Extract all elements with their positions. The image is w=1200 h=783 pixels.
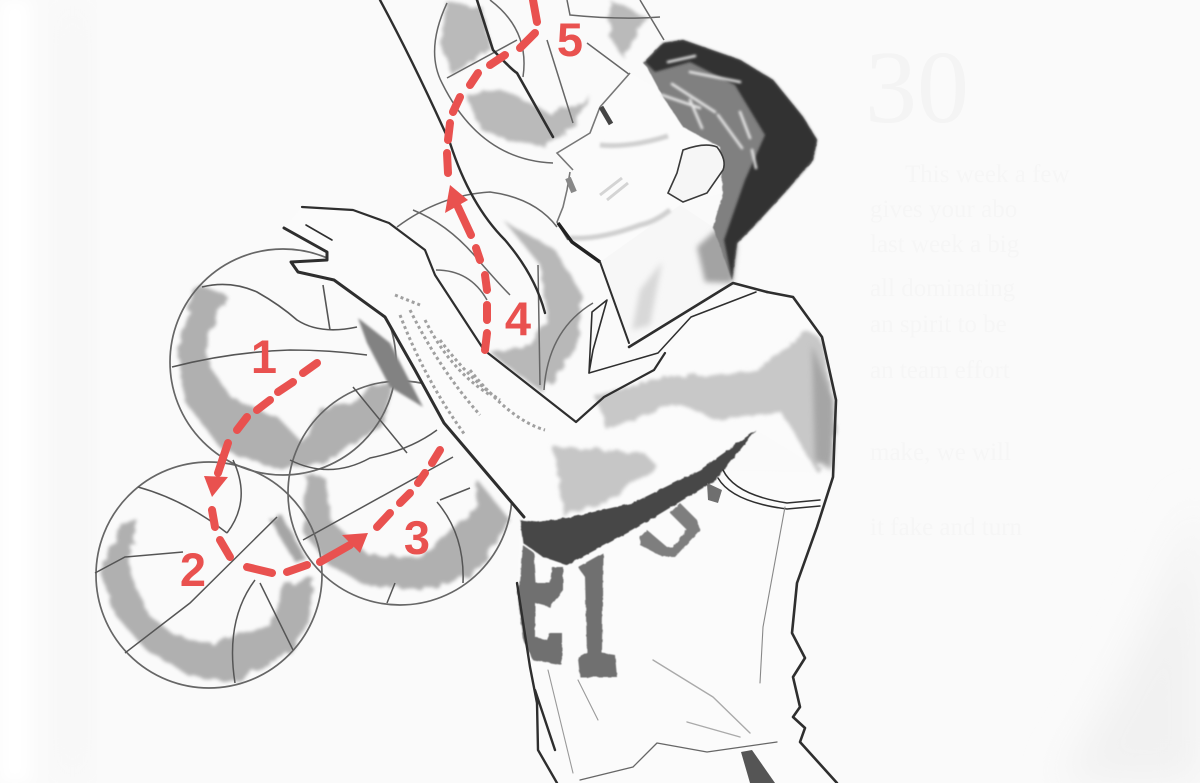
jersey torso <box>517 470 837 783</box>
faint bleed-through page text: an spirit to be <box>870 311 1007 338</box>
hair <box>643 40 817 280</box>
faint bleed-through page text: last week a big <box>870 231 1020 258</box>
faint bleed-through page text: make, we will <box>870 439 1011 466</box>
faint bleed-through page text: This week a few <box>905 161 1070 188</box>
arm and hand <box>284 207 836 517</box>
faint bleed-through page text: an team effort <box>870 357 1010 384</box>
dashes: step 4 to 5 <box>458 207 487 350</box>
dashes: step 5 <box>447 0 537 173</box>
step numbers: 3 <box>404 511 430 564</box>
red dashed motion path <box>212 0 537 573</box>
player figure <box>284 0 837 783</box>
arrowheads <box>204 185 468 553</box>
arm shading <box>553 447 658 517</box>
ball 4 <box>397 192 593 390</box>
ball 1 <box>170 249 396 475</box>
face and head <box>557 73 723 262</box>
ball 5 <box>435 0 664 163</box>
faint bleed-through page text: gives your abo <box>870 196 1017 223</box>
faint bleed-through page text <box>865 30 1070 541</box>
ball 3 <box>288 381 512 605</box>
waistband shadow <box>741 750 775 783</box>
step numbers: 2 <box>180 543 206 596</box>
hairy forearm hatching <box>395 295 545 435</box>
faint bleed-through page text: all dominating <box>870 275 1016 302</box>
face outline <box>557 73 630 240</box>
arm, neck and collar outlines <box>284 0 837 783</box>
faint bleed-through page text: it fake and turn <box>870 514 1023 541</box>
faint bleed-through page text: 30 <box>865 30 969 145</box>
step numbers <box>180 13 583 596</box>
dashes: step 1 to 2 <box>218 363 317 473</box>
dashes: step 3 to 4 <box>377 450 440 527</box>
dark underarm band <box>520 430 756 565</box>
step numbers: 5 <box>557 13 583 66</box>
neck <box>600 205 737 343</box>
step numbers: 1 <box>251 330 277 383</box>
step numbers: 4 <box>505 292 531 345</box>
jersey letters <box>517 545 563 665</box>
dashes: step 2 to 3 <box>212 510 350 573</box>
ball 2 <box>95 460 322 688</box>
ear <box>668 145 724 202</box>
